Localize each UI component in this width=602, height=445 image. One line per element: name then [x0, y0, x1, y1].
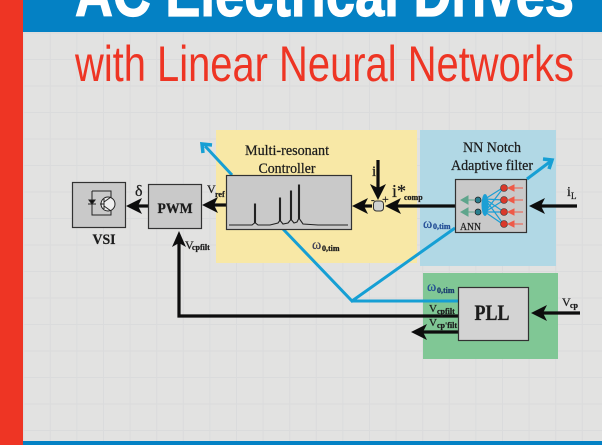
- summing junction: [371, 192, 389, 211]
- bottom blue band: [23, 441, 602, 445]
- signal labels: i: [567, 185, 571, 200]
- signal labels: ω: [427, 280, 436, 295]
- signal labels: ref: [215, 190, 225, 199]
- label: multi-resonant controller heading: [245, 143, 330, 177]
- signal labels: δ: [135, 183, 143, 200]
- signal labels: cp'filt: [437, 321, 457, 330]
- label: multi-resonant controller heading: Multi-resonant: [245, 143, 330, 159]
- signal labels: 0,tim: [437, 286, 455, 295]
- signal labels: i*: [392, 181, 406, 201]
- top blue title band: [23, 0, 602, 32]
- signal labels: V: [429, 317, 437, 329]
- block: ANN: [456, 180, 526, 233]
- panel: NN notch adaptive filter background: [420, 130, 556, 266]
- signal labels: cp: [570, 301, 579, 310]
- signal labels: [135, 164, 579, 330]
- block: PWM: PWM: [158, 201, 192, 217]
- panel: PLL background: [423, 273, 558, 359]
- signal labels: V: [207, 182, 216, 196]
- block: VSI: [72, 182, 126, 248]
- block: PLL: PLL: [474, 300, 510, 325]
- arrow: blue adaptive arrowheads: [202, 144, 552, 169]
- signal labels: cpfilt: [192, 243, 210, 252]
- summing junction: +: [382, 192, 389, 206]
- label: NN notch adaptive filter heading: NN Notch: [463, 140, 521, 156]
- left red stripe: [0, 0, 23, 445]
- signal labels: V: [185, 238, 194, 252]
- signal labels: V: [429, 303, 437, 315]
- signal labels: cpfilt: [437, 307, 455, 316]
- signal labels: ω: [423, 217, 432, 232]
- flow diagram: [72, 130, 580, 359]
- block: PLL: [458, 288, 528, 340]
- label: NN notch adaptive filter heading: [451, 140, 533, 174]
- summing junction: -: [371, 194, 375, 206]
- signal labels: V: [562, 295, 571, 309]
- icon: IGBT with diode: [88, 191, 115, 215]
- label: NN notch adaptive filter heading: Adaptive filter: [451, 158, 533, 174]
- signal labels: comp: [404, 193, 423, 202]
- arrowheads: black: [126, 184, 547, 340]
- chart: resonant peaks: [229, 185, 348, 225]
- block: ANN: ANN: [460, 222, 481, 233]
- signal labels: L: [571, 191, 576, 201]
- signal labels: 0,tim: [322, 244, 340, 253]
- panel: multi-resonant controller background: [216, 130, 417, 263]
- icon: neural network: [461, 184, 523, 228]
- label: multi-resonant controller heading: Controller: [258, 161, 316, 177]
- signal labels: ω: [312, 238, 321, 253]
- blue signal lines: [205, 146, 551, 301]
- block: multi-resonant controller spectrum: [226, 176, 352, 230]
- block: PWM: [148, 184, 202, 228]
- black signal lines: [136, 160, 580, 332]
- block: VSI: VSI: [92, 232, 116, 248]
- signal labels: 0,tim: [433, 222, 451, 231]
- signal labels: i: [372, 164, 376, 180]
